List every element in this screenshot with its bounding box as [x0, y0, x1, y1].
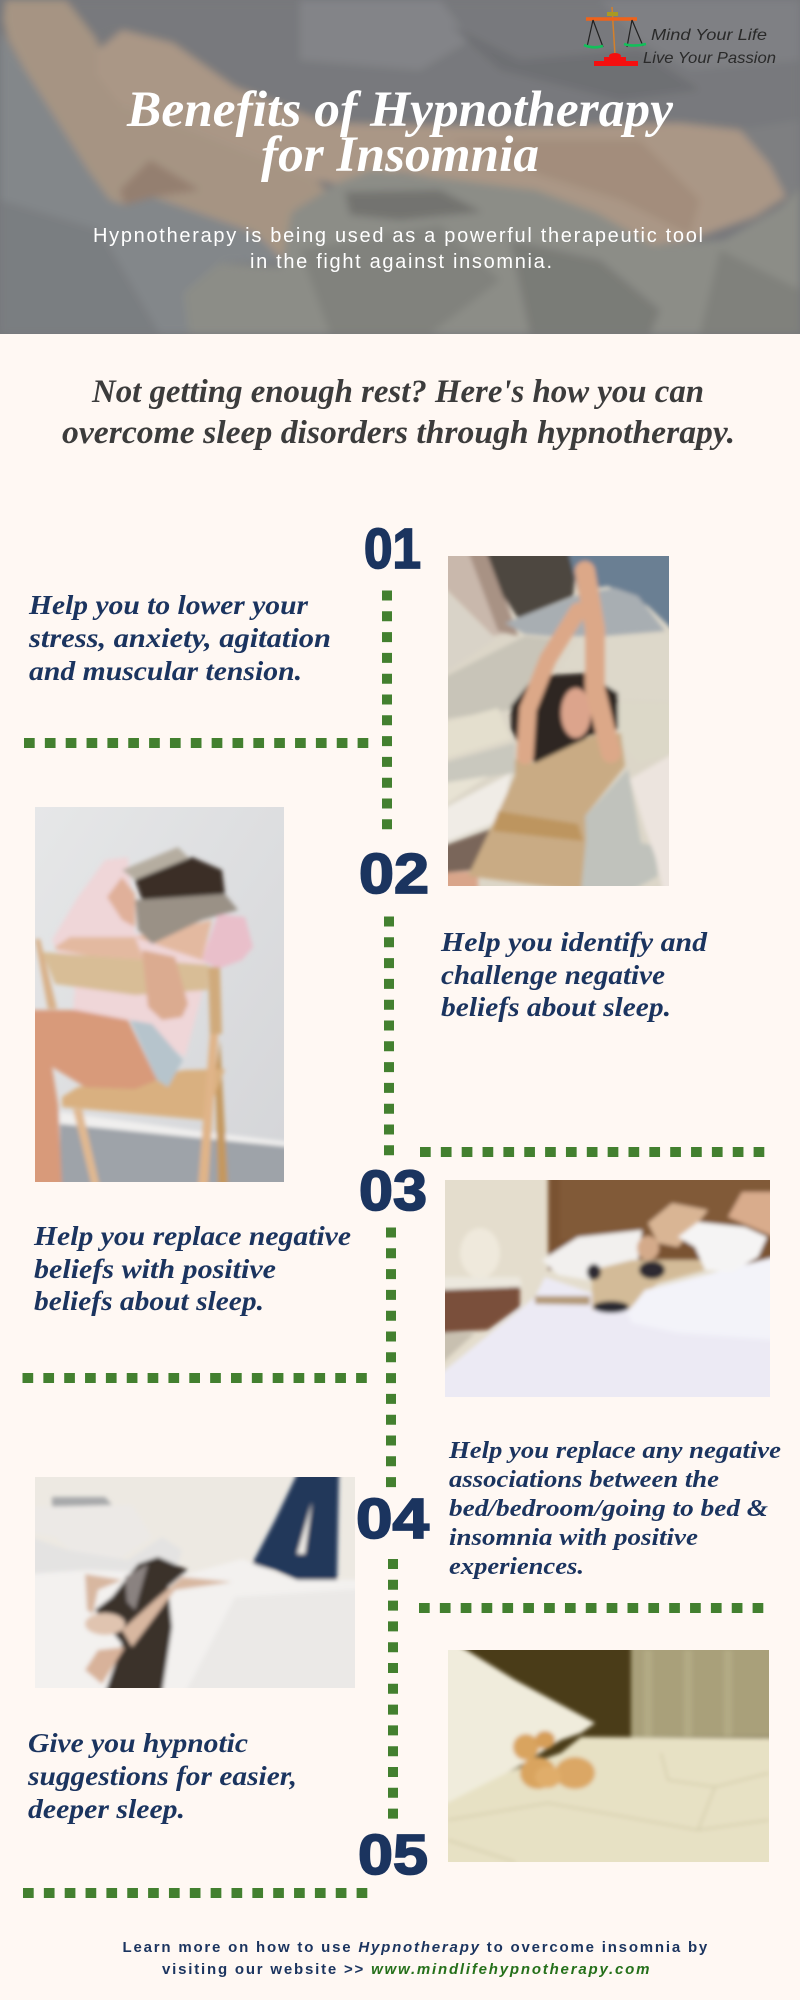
logo: Mind Your Life Live Your Passion	[584, 7, 776, 67]
step 05 text: deeper sleep.	[28, 1794, 185, 1824]
step 01 text	[28, 590, 331, 686]
step 05 text: suggestions for easier,	[27, 1761, 297, 1791]
step 01 number: 01	[364, 517, 421, 581]
icon: balance scale	[584, 7, 646, 66]
photo: teddy bear on mattress	[448, 1650, 769, 1862]
step 04 text: experiences.	[449, 1554, 584, 1580]
step 02 text: challenge negative	[441, 960, 665, 990]
step 04 text: insomnia with positive	[449, 1525, 698, 1551]
footer call to action: Learn more on how to use Hypnotherapy to overcome insomnia by	[122, 1939, 709, 1956]
step 03 text	[33, 1221, 351, 1316]
dotted connector 04	[393, 1559, 764, 1820]
step 02 text	[440, 927, 708, 1022]
intro heading: Not getting enough rest? Here's how you can	[91, 374, 704, 410]
subtitle	[93, 225, 703, 273]
logo text: Live Your Passion	[643, 50, 776, 67]
step 05 number: 05	[358, 1823, 428, 1887]
step 03 number: 03	[359, 1159, 427, 1223]
step 03 text: beliefs about sleep.	[34, 1286, 264, 1316]
hero panel with photo of feet on a bed	[0, 0, 800, 334]
step 04 number: 04	[356, 1487, 429, 1551]
logo text: Mind Your Life	[651, 27, 767, 44]
logo text	[643, 27, 776, 67]
step 02 number: 02	[359, 842, 429, 906]
dotted connector 01	[24, 590, 387, 831]
footer call to action	[122, 1939, 709, 1978]
footer call to action: visiting our website >> www.mindlifehypnotherapy.com	[162, 1961, 651, 1978]
intro heading	[62, 374, 735, 451]
subtitle: in the fight against insomnia.	[250, 251, 552, 273]
dotted connector 02	[389, 916, 765, 1156]
step 01 text: Help you to lower your	[28, 590, 309, 620]
step 02 text: Help you identify and	[440, 927, 708, 957]
step 04 text: Help you replace any negative	[448, 1438, 781, 1464]
subtitle: Hypnotherapy is being used as a powerful therapeutic tool	[93, 225, 703, 247]
photo: tired woman on chair	[35, 807, 284, 1182]
photo: woman lying face down on bed	[35, 1477, 355, 1688]
dotted connector 05	[23, 1888, 368, 1898]
step 04 text: associations between the	[449, 1467, 719, 1493]
step 04 text	[448, 1438, 781, 1580]
dotted connector 03	[22, 1228, 391, 1489]
photo: woman and pug sleeping	[445, 1180, 770, 1397]
step 04 text: bed/bedroom/going to bed &	[449, 1496, 768, 1522]
step 03 text: beliefs with positive	[34, 1254, 276, 1284]
step 05 text	[27, 1728, 297, 1824]
step 01 text: and muscular tension.	[29, 656, 302, 686]
photo: woman stretching on pillows	[448, 556, 669, 886]
title: Benefits of Hypnotherapy	[126, 82, 673, 138]
step 03 text: Help you replace negative	[33, 1221, 351, 1251]
step 01 text: stress, anxiety, agitation	[28, 623, 331, 653]
title	[126, 82, 673, 183]
step 02 text: beliefs about sleep.	[441, 992, 671, 1022]
intro heading: overcome sleep disorders through hypnotherapy.	[62, 415, 735, 451]
step 05 text: Give you hypnotic	[28, 1728, 248, 1758]
title: for Insomnia	[261, 127, 539, 183]
